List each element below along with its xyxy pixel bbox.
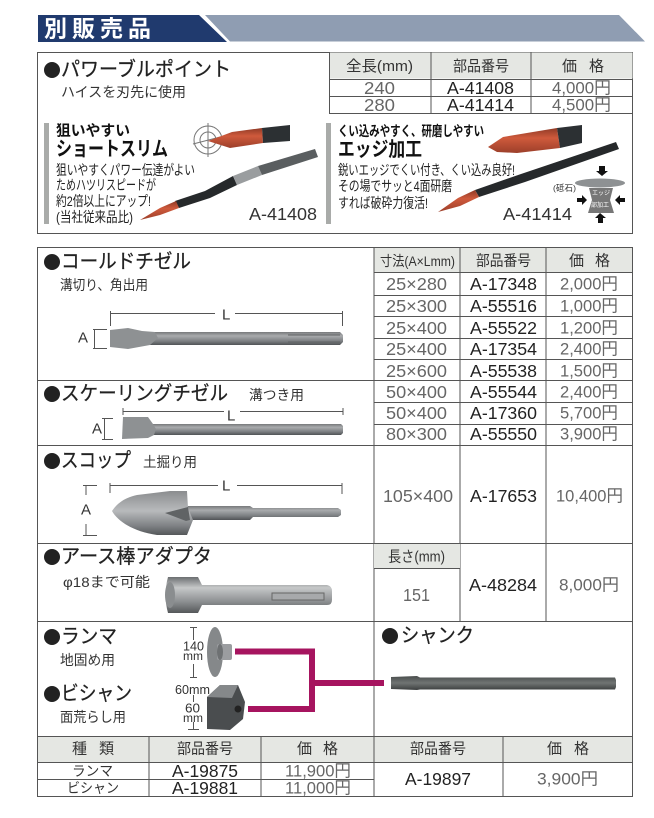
product: bushing tool: 60 [185,700,200,716]
product: rammer: 140 [183,638,204,654]
icon: whetstone grinding diagram: エッジ [592,190,610,197]
product: scoop: 土掘り用 [143,454,197,470]
tool: slim point [140,149,318,220]
spec table: 4,000円 [552,78,611,98]
spec table: rammer, bushing, shank: A-19881 [172,778,238,798]
spec table: chisels: 25×400 [386,318,447,338]
spec table: rammer, bushing, shank [38,736,632,798]
spec table: chisels: 部品番号 [476,252,531,270]
spec table: rammer, bushing, shank: 部品番号 [410,740,466,758]
product: earth rod adapter: φ18まで可能 [63,574,150,590]
spec table: chisels [38,248,632,736]
product: bushing tool: 面荒らし用 [60,709,126,725]
spec table: chisels: 25×300 [386,296,447,316]
spec table: chisels: 25×600 [386,361,447,381]
spec table: rammer, bushing, shank: ビシャン [67,780,119,796]
product: earth rod adapter [38,544,632,622]
spec table: 価格 [562,58,604,75]
spec table: rammer, bushing, shank: 価格 [297,740,338,758]
panel: chisels, scoop, adapter, rammer and shank [38,248,632,798]
spec table: 部品番号 [453,58,509,75]
sub-panel: エッジ加工: A-41414 [503,204,572,224]
tool: rammer plate [207,627,232,677]
product: cold chisel: L [222,306,230,324]
tool: edge point [438,142,619,212]
product: scoop [44,450,342,536]
sub-panel: エッジ加工 [326,123,625,224]
tool: scaling chisel [122,417,343,439]
tool: adapter [165,577,332,613]
product: scoop: A [81,502,91,518]
product: shank [382,624,616,690]
adapter table cells: 8,000円 [559,576,619,594]
tool: shank [391,676,616,690]
product: scaling chisel: 溝つき用 [249,387,304,403]
subtitle: ハイスを刃先に使用 [61,84,186,100]
spec table: A-41414 [447,95,514,115]
spec table: chisels: 50×400 [386,403,447,423]
sub-panel: エッジ加工: 鋭いエッジでくい付き、くい込み良好! [338,162,515,178]
spec table: 280 [364,95,395,115]
sub-panel: ショートスリム: 狙いやすい [56,122,130,140]
adapter table cells: A-48284 [469,575,537,595]
product: bushing tool: mm [183,711,203,725]
spec table: chisels: 2,000円 [560,274,618,294]
spec table: chisels: A-17360 [470,403,537,423]
spec table: rammer, bushing, shank: 11,000円 [285,778,351,798]
product: bushing tool: ビシャン [61,682,132,705]
adapter table cells [38,544,632,622]
tool: bushing head [207,685,245,730]
sub-panel: エッジ加工: その場でサッと4面研磨 [338,178,452,194]
spec table: chisels: 1,000円 [560,296,618,316]
product title: パワーブルポイント [61,57,231,81]
sub-panel: ショートスリム: 狙いやすくパワー伝達がよい [56,162,195,178]
spec table: chisels: A-55538 [470,361,537,381]
product: scoop: スコップ [61,450,131,472]
sub-panel: ショートスリム: (当社従来品比) [56,209,133,225]
spec table: chisels: A-55522 [470,318,537,338]
spec table: rammer, bushing, shank: 11,900円 [285,762,351,780]
product: shank: シャンク [401,624,474,647]
product: scoop: L [222,478,230,494]
sub-panel: エッジ加工: すれば破砕力復活! [338,195,428,211]
spec table: rammer, bushing, shank: A-19897 [405,769,471,789]
product: cold chisel: コールドチゼル [61,250,191,273]
section header banner [38,15,645,42]
spec table: rammer, bushing, shank: 価格 [547,740,589,758]
spec table: rammer, bushing, shank: ランマ [72,763,113,779]
spec table: rammer, bushing, shank: 部品番号 [177,740,233,758]
icon: target with slim tip [193,123,290,157]
product: scaling chisel: A [92,420,102,438]
spec table: chisels: 3,900円 [560,424,618,444]
panel: パワーブルポイント [38,52,632,234]
spec table: chisels: 105×400 [383,486,453,506]
sub-panel: ショートスリム: 約2倍以上にアップ! [56,193,151,209]
connector: rammer and bushing to shank [235,652,384,709]
product: rammer: 地固め用 [60,652,115,668]
spec table: rammer, bushing, shank: 3,900円 [537,770,598,788]
sub-panel: エッジ加工: くい込みやすく、研磨しやすい [338,123,484,139]
tool: scoop [112,491,341,535]
sub-panel: エッジ加工: エッジ加工 [338,138,422,161]
adapter table cells: 151 [403,585,430,605]
spec table: A-41408 [447,78,514,98]
spec table: chisels: A-17653 [470,486,537,506]
product: cold chisel: 溝切り、角出用 [60,277,148,293]
product: rammer: ランマ [61,626,117,648]
product: bushing tool [44,682,245,730]
product: rammer [44,626,232,678]
spec table: chisels: 5,700円 [560,404,618,422]
row divider: scoop / adapter [38,542,632,544]
icon: whetstone grinding diagram: 部加工 [591,201,609,209]
spec table: 4,500円 [552,96,611,114]
product: cold chisel: A [78,330,88,346]
spec table: chisels: 80×300 [386,424,447,444]
adapter table cells: 長さ(mm) [388,548,445,566]
icon: whetstone grinding diagram [553,166,625,223]
heading: 別販売品: 別販売品 [44,16,151,42]
tool: cold chisel [110,328,343,349]
sub-panel: ショートスリム: ためハツリスピードが [56,177,156,193]
spec table: chisels: 50×400 [386,382,447,402]
spec table: chisels: 2,400円 [560,340,618,358]
icon: whetstone grinding diagram: (砥石) [553,183,576,193]
spec table: 240 [364,78,395,98]
product: rammer: mm [183,649,203,663]
spec table: chisels: 25×400 [386,339,447,359]
spec table: rammer, bushing, shank: A-19875 [172,761,238,781]
spec table [330,52,632,115]
spec table: chisels: 寸法(A×Lmm) [380,253,455,269]
spec table: chisels: 価格 [569,252,610,270]
spec table: 全長(mm) [346,58,413,75]
spec table: chisels: 25×280 [386,274,447,294]
spec table: chisels: 2,400円 [560,382,618,402]
icon: edge tip close-up [488,125,582,153]
product: scaling chisel: スケーリングチゼル [61,382,228,405]
sub-panel: ショートスリム: ショートスリム [56,138,168,160]
spec table: chisels: 1,200円 [560,318,618,338]
spec table: chisels: A-55550 [470,424,537,444]
spec table: chisels: A-17348 [470,274,537,294]
spec table: rammer, bushing, shank: 種類 [72,740,114,758]
product: scaling chisel: L [227,408,235,424]
spec table: chisels: A-55516 [470,296,537,316]
spec table: chisels: A-17354 [470,339,537,359]
spec table: chisels: 10,400円 [556,486,623,506]
product: bushing tool: 60mm [175,683,210,697]
sub-panel: ショートスリム [44,122,318,225]
spec table: chisels: 1,500円 [560,362,618,380]
spec table: chisels: A-55544 [470,382,537,402]
product: scaling chisel [44,382,343,440]
product: earth rod adapter: アース棒アダプタ [61,545,212,568]
sub-panel: ショートスリム: A-41408 [249,204,317,224]
product: cold chisel [44,250,343,349]
